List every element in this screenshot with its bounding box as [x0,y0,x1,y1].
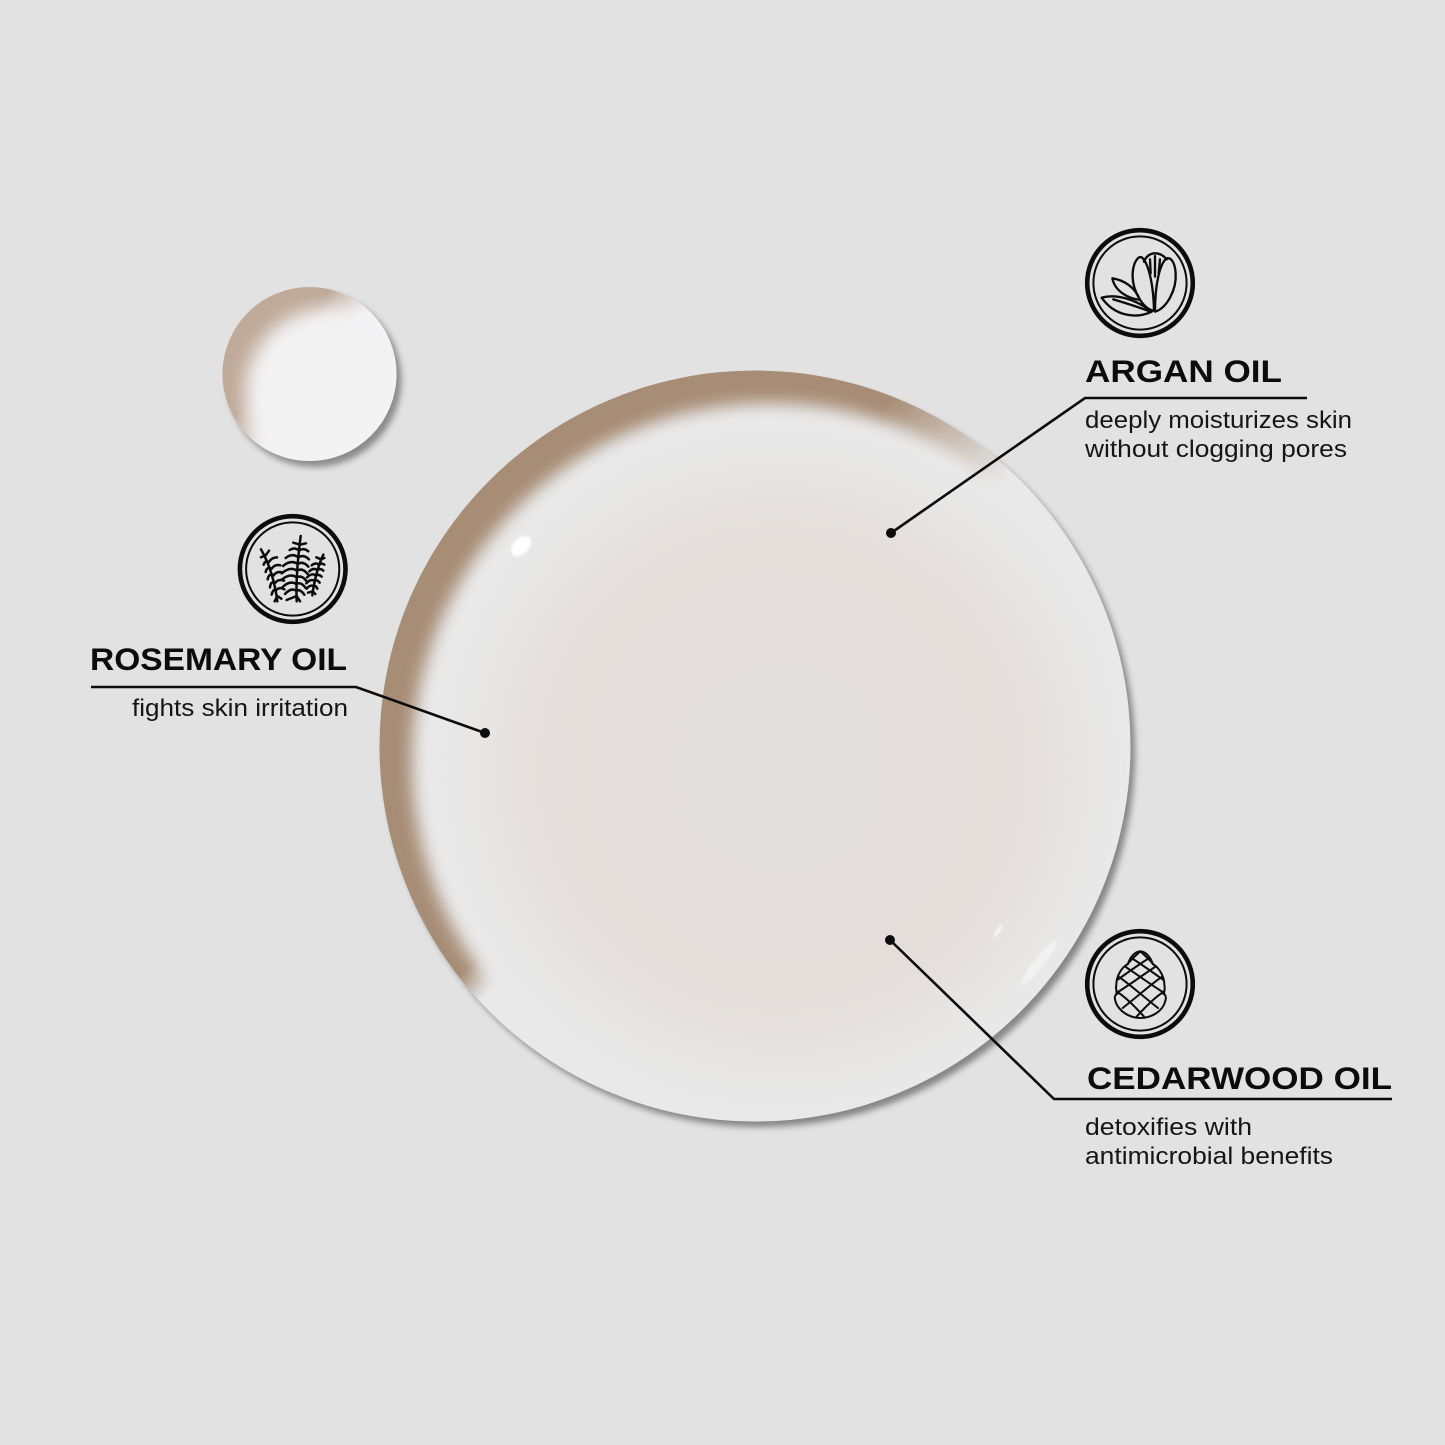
leader line: cedarwood oil [890,940,1392,1099]
icon: pine cone [1087,931,1193,1037]
leader dot: cedarwood oil [885,935,895,945]
large oil droplet [379,370,1135,1127]
description: cedarwood oil: detoxifies with [1085,1114,1252,1141]
leader line: argan oil [891,398,1307,533]
description: argan oil [1084,407,1352,463]
heading: rosemary oil: ROSEMARY OIL [90,641,347,677]
highlight: lower right small [992,923,1004,939]
leader dot: argan oil [886,528,896,538]
leader line: rosemary oil [91,687,485,733]
leader dot: rosemary oil [480,728,490,738]
highlight: lower right streak [1018,938,1060,988]
small oil droplet [222,286,413,476]
description: cedarwood oil [1085,1114,1333,1170]
description: argan oil: without clogging pores [1084,436,1347,463]
icon: rosemary [240,516,346,622]
heading: cedarwood oil: CEDARWOOD OIL [1087,1060,1392,1096]
icon: argan nut [1087,230,1193,336]
callout: rosemary oil [90,516,490,738]
callout: cedarwood oil [885,931,1392,1170]
description: rosemary oil: fights skin irritation [132,695,348,722]
callout: argan oil [886,230,1352,538]
description: argan oil: deeply moisturizes skin [1085,407,1352,434]
heading: argan oil: ARGAN OIL [1085,353,1282,389]
highlight: upper left [507,532,535,560]
description: cedarwood oil: antimicrobial benefits [1085,1143,1333,1170]
